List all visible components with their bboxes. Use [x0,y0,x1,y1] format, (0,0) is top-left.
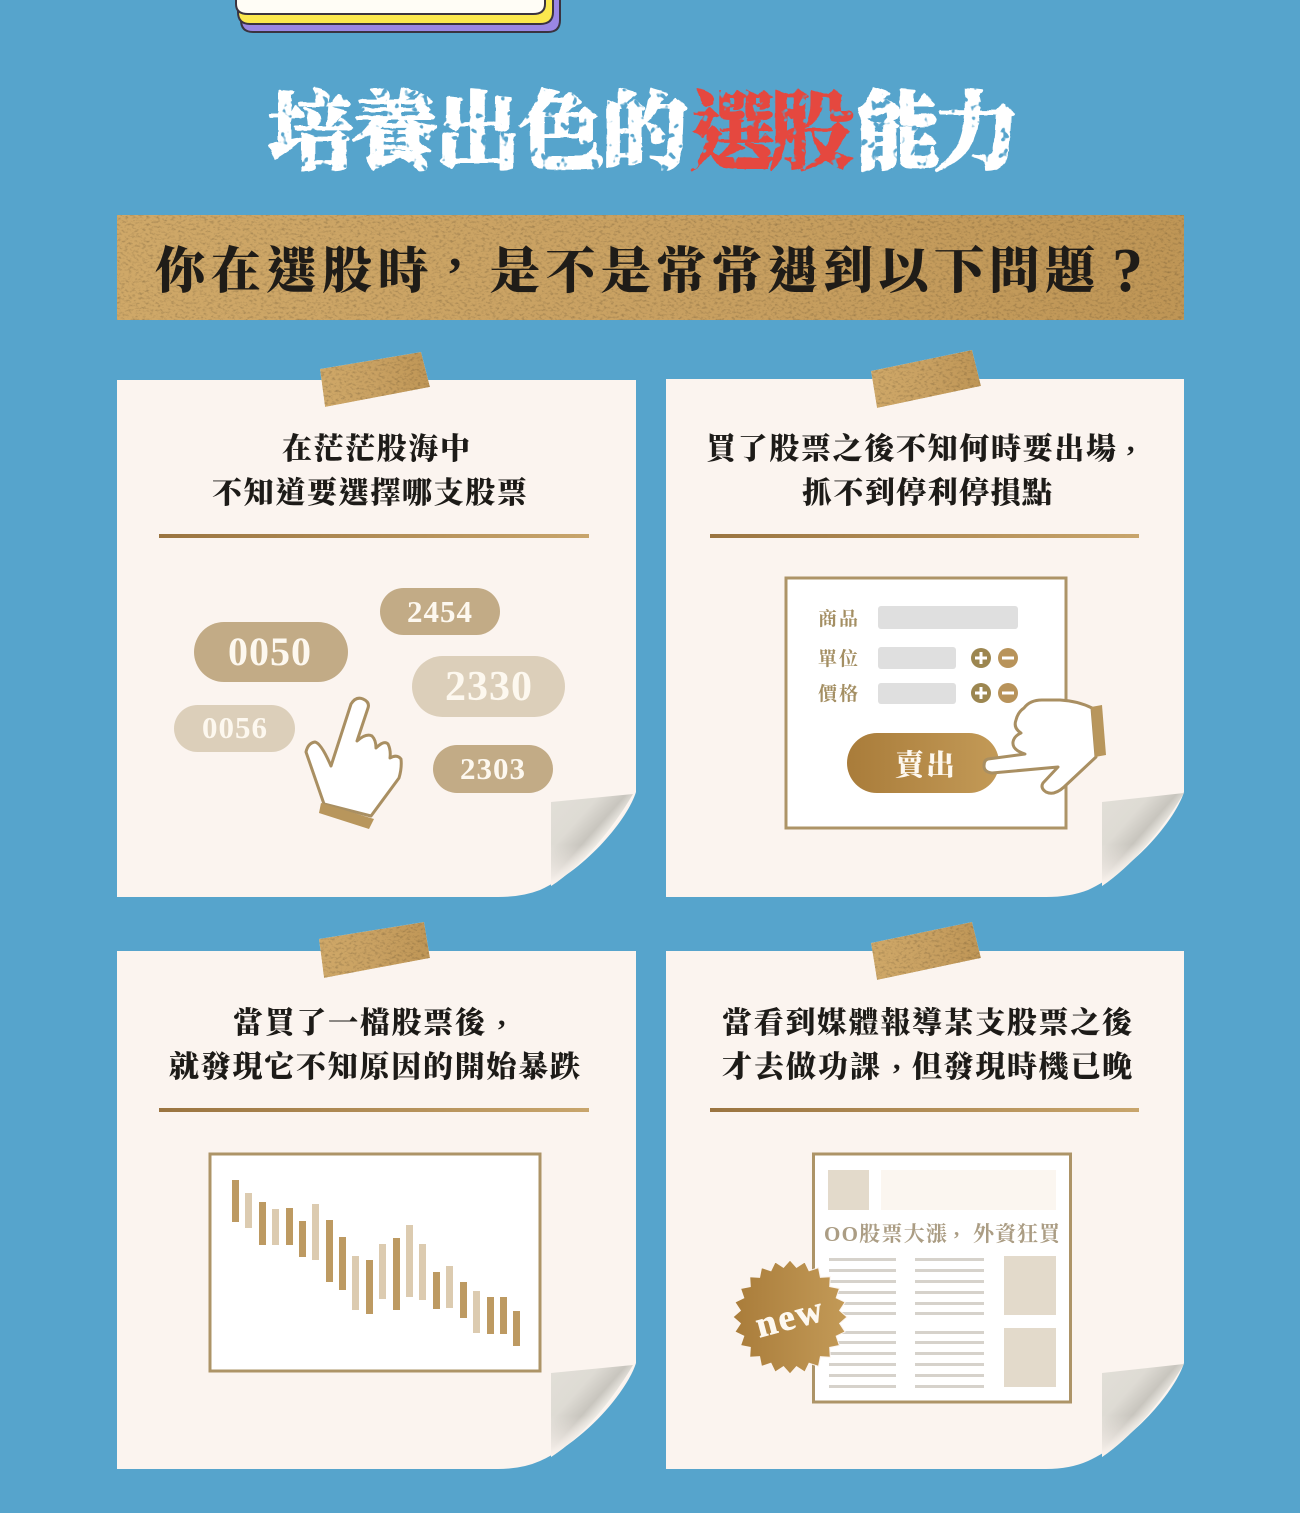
order form: 價格 [818,683,858,705]
order form [786,578,1066,828]
stock pills: 0050 [228,629,312,674]
panel: when to sell [666,350,1184,897]
banner: 你在選股時 [155,243,428,299]
heading 4 [722,1005,1134,1084]
stock pills: 0056 [202,710,268,745]
order form: 單位 [818,648,858,670]
heading 4: 才去做功課 [722,1051,880,1084]
panel: sudden drop [117,922,636,1469]
heading 3: 就發現它不知原因的開始暴跌 [169,1050,580,1084]
divider 1 [159,534,589,538]
page curl 2 [1102,793,1184,886]
newspaper: , [954,1216,959,1240]
tape 3 [319,922,430,978]
divider 4 [710,1108,1139,1112]
banner: ? [1112,237,1143,305]
tape 2 [871,350,981,408]
sell button [847,733,999,793]
page curl 1 [551,794,633,886]
page curl 3 [551,1365,633,1457]
panel: too many stocks [117,352,636,897]
top stacked card remnant [236,0,560,32]
heading 4: 當看到媒體報導某支股票之後 [722,1005,1134,1040]
stock pills: 2303 [460,751,526,786]
stock pills: 2330 [445,664,533,710]
sell button: 賣出 [895,749,955,782]
heading 2 [706,425,1134,510]
heading 4: , [893,1043,900,1076]
title [268,85,1020,181]
icon: hand pressing button [984,700,1106,793]
paper card 1 [117,380,636,897]
heading 1: 不知道要選擇哪支股票 [212,476,527,510]
newspaper [814,1154,1070,1402]
tape 4 [871,922,981,980]
title: 選股 [690,85,855,181]
heading 3: 當買了一檔股票後 [233,1006,487,1040]
heading 1: 在茫茫股海中 [282,433,470,466]
stock pills: 2454 [407,594,473,629]
order form: 商品 [818,608,858,630]
banner: 是不是常常遇到以下問題 [490,243,1102,299]
banner: , [449,221,462,277]
icon: pointing hand [306,698,401,829]
heading 2: , [1127,425,1134,458]
divider 3 [159,1108,589,1112]
heading 3 [169,999,580,1084]
heading 4: 但發現時機已晚 [912,1051,1132,1084]
candlestick chart [210,1154,540,1371]
panel: media news too late [666,922,1184,1469]
banner [117,215,1184,320]
heading 1 [212,433,527,510]
paper card 4 [666,951,1184,1469]
page curl 4 [1102,1364,1184,1457]
heading 2: 買了股票之後不知何時要出場 [706,432,1116,466]
newspaper: 外資狂買 [973,1222,1063,1246]
paper card 2 [666,379,1184,897]
tape 1 [320,352,430,407]
paper card 3 [117,951,636,1469]
heading 2: 抓不到停利停損點 [802,476,1052,510]
newspaper: OO股票大漲 [824,1222,947,1246]
heading 3: , [498,999,506,1032]
divider 2 [710,534,1139,538]
title: 能力 [855,85,1020,181]
title: 培養出色的 [268,85,688,181]
badge: new: new [751,1289,829,1346]
stock pills [174,588,565,793]
badge: new [733,1260,847,1374]
